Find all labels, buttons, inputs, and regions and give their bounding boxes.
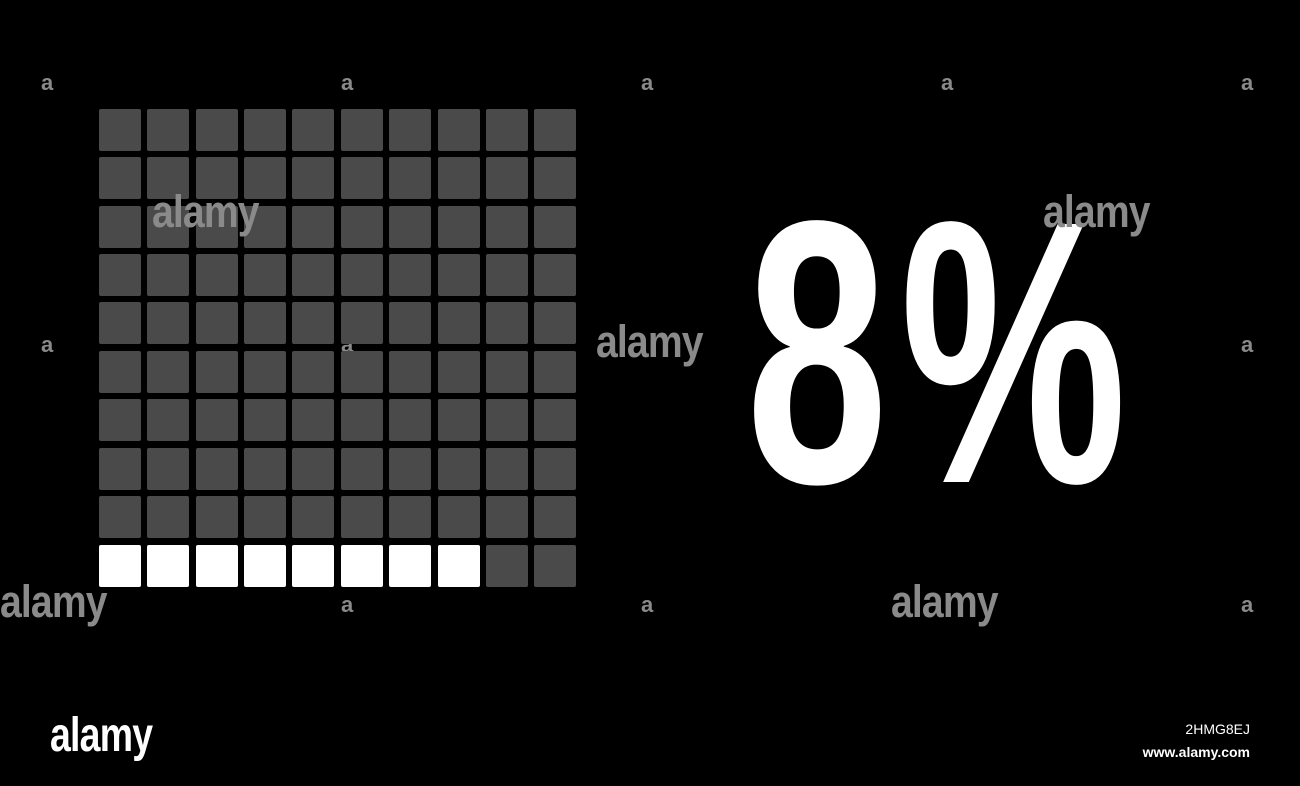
watermark letters: a <box>341 70 353 95</box>
watermarks: alamy <box>1043 186 1150 237</box>
image id and url: 2HMG8EJ <box>1185 721 1250 737</box>
waffle chart <box>99 109 576 587</box>
image id and url: www.alamy.com <box>1143 744 1250 760</box>
watermark letters: a <box>1241 332 1253 357</box>
watermark letters: a <box>1241 70 1253 95</box>
image id and url <box>1142 721 1250 760</box>
watermark letters: a <box>941 70 953 95</box>
watermarks: alamy <box>152 186 259 237</box>
watermark letters: a <box>341 332 353 357</box>
percentage value: 8% <box>746 144 1139 562</box>
watermark letters: a <box>41 332 53 357</box>
watermark letters: a <box>341 592 353 617</box>
watermarks: alamy <box>891 576 998 627</box>
watermark letters: a <box>641 70 653 95</box>
watermarks: alamy <box>596 316 703 367</box>
watermark letters: a <box>1241 592 1253 617</box>
watermark letters: a <box>641 592 653 617</box>
watermarks: alamy <box>0 576 107 627</box>
logo: alamy <box>50 709 152 762</box>
watermark letters: a <box>41 70 53 95</box>
